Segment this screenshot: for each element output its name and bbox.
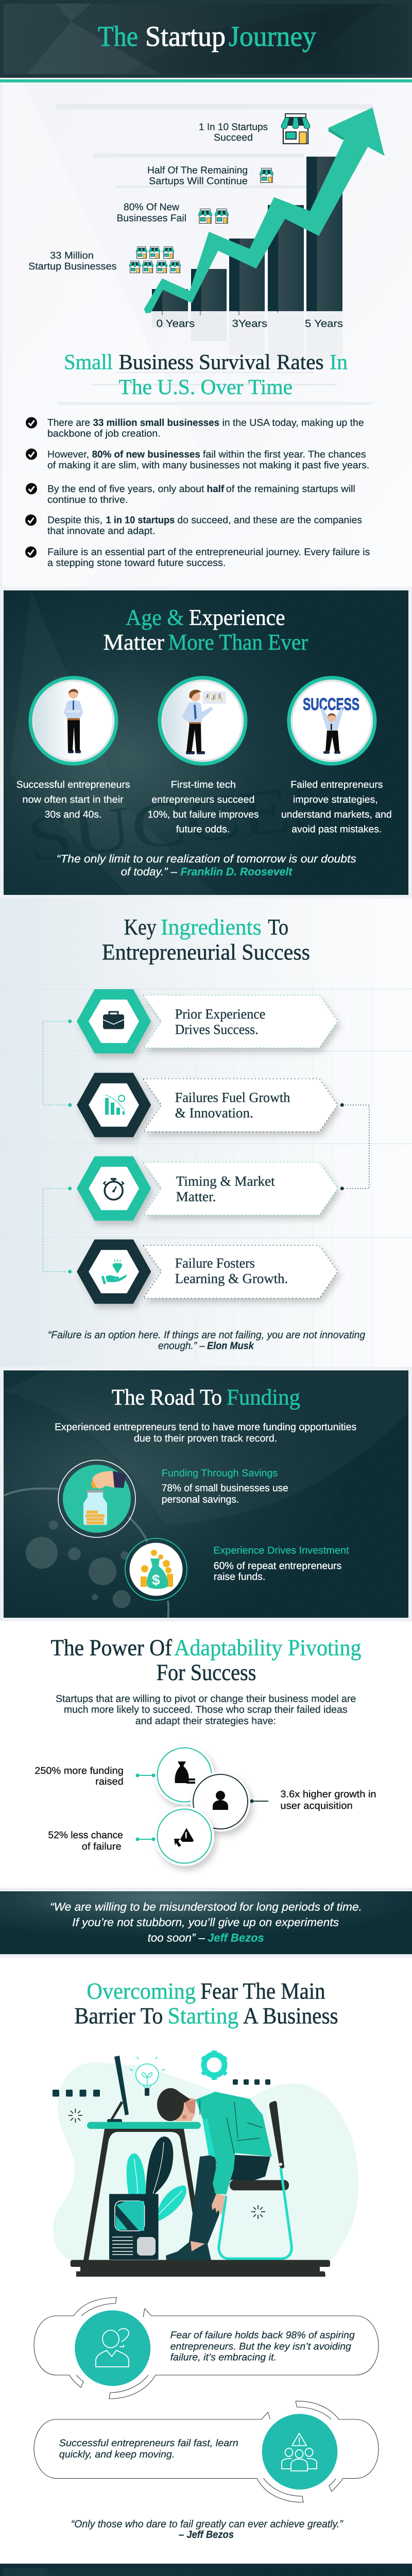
label: 3.6x higher growth [280,1789,376,1811]
label: 52% less chance: of failure [82,1841,122,1852]
text: experience drives investment: raise funds. [214,1571,265,1583]
heading: key ingredients [102,914,310,964]
text: timing and market matter: Matter. [176,1189,216,1205]
label: 250% more funding [35,1766,124,1787]
text: funding intro [55,1421,357,1444]
icon: confident entrepreneur in circle [28,676,118,766]
text: pivot intro: much more likely to succeed. Those who scrap their failed ideas [64,1704,348,1715]
label: 3.6x higher growth: 3.6x higher growth in [280,1789,376,1800]
heading: overcoming fear: A Business [243,2003,338,2029]
heading: key ingredients: To [268,914,288,940]
title: The [98,21,138,53]
text block: first-time tech entrepreneurs: future odds. [176,824,230,835]
panel: power of adaptability [0,1621,412,1888]
label: 1 in 10 startups succeed: Succeed [214,132,253,143]
bullet 4: Despite this, [47,515,102,526]
panel: Jeff Bezos quote band: Jeff Bezos [208,1931,264,1944]
label: 250% more funding: 250% more funding [35,1766,124,1776]
title: Startup [145,21,226,53]
quote: Franklin D. Roosevelt: of today.” – [121,866,178,878]
icon: briefcase [103,1012,124,1029]
label: 3 years: 3Years [232,318,267,329]
label: 33 million startup businesses: Startup Businesses [28,261,116,272]
text block: failed entrepreneurs [281,779,392,835]
heading: age and experience: Age & [126,605,184,630]
label: half of the remaining: Half Of The Remaining [147,165,248,176]
text: fail fast [59,2438,238,2460]
connector: left dotted 1-2 [43,1020,72,1107]
text: fear of failure [170,2330,355,2363]
quote: Elon Musk: Elon Musk [207,1340,254,1351]
ground under the illustration [71,2260,330,2277]
panel: Jeff Bezos quote band: If you’re not stubborn, you’ll give up on experiments [72,1916,339,1929]
panel: Jeff Bezos quote band [0,1891,412,1954]
panel: overcoming fear [0,1958,412,2564]
card: failures fuel growth [77,1073,338,1137]
text block: first-time tech entrepreneurs: First-time tech [171,779,236,790]
text: funding intro: Experienced entrepreneurs tend to have more funding opportunities [55,1421,357,1433]
icon: savings jar with coins [58,1460,135,1537]
bar chart with growth arrow [144,108,384,361]
bullet 5 [25,546,370,569]
bullet 1: 33 million small businesses [93,418,219,429]
label: 1 in 10 startups succeed: 1 In 10 Startups [199,122,268,133]
heading: small business survival rates: Survival [199,351,271,375]
text: timing and market matter [176,1174,275,1205]
text: funding through savings: 78% of small businesses use [162,1482,288,1494]
text: failure fosters learning and growth [175,1255,288,1286]
bullet 4: 1 in 10 startups [106,515,175,526]
bullet 1: There are [47,418,90,429]
heading: age and experience [103,605,308,655]
heading: small business survival rates: In [330,351,348,375]
heading: power of adaptability: Adaptability Pivoting [174,1635,362,1660]
bullet 3 [26,483,355,505]
text: fail fast: quickly, and keep moving. [59,2449,175,2460]
quote: Elon Musk: enough.” – [158,1340,205,1351]
label: 80% of new businesses fail: Businesses Fail [116,213,186,224]
connector: left dotted 3-4 [43,1187,72,1274]
heading: key ingredients: Ingredients [161,914,262,940]
icon: failure warning circle [154,1806,214,1866]
text: failures fuel growth and innovation: Failures Fuel Growth [175,1090,290,1105]
callout: fear of failure [34,2298,379,2399]
heading: key ingredients: Entrepreneurial Success [102,939,310,964]
text: failures fuel growth and innovation [175,1090,290,1121]
icon: money bag: $ [152,1572,160,1588]
connector: funding [136,1773,156,1777]
label: 3.6x higher growth: user acquisition [280,1801,353,1811]
bullet 3: By the end of five years, only about [47,484,204,495]
heading: power of adaptability: The Power Of [50,1635,172,1660]
quote: Franklin D. Roosevelt: Franklin D. Roosevelt [180,866,293,878]
label: 52% less chance [48,1830,123,1852]
title [98,21,316,53]
icon: person with idea [96,2329,129,2367]
label: 0 years: 0 Years [157,318,195,329]
heading: small business survival rates: Small [64,351,113,375]
panel: title header [0,0,412,82]
text: pivot intro: Startups that are willing to pivot or change their business model are [56,1693,356,1704]
text: pivot intro [56,1693,356,1727]
text: experience drives investment: Experience Drives Investment [213,1545,349,1556]
text: failure fosters learning and growth: Failure Fosters [175,1255,255,1270]
text: fear of failure: Fear of failure holds back 98% of aspiring [170,2330,355,2341]
icon: gear [201,2050,228,2080]
heading: the road to funding: Funding [227,1384,300,1410]
icon: user acquisition circle [191,1772,250,1832]
heading: power of adaptability [50,1635,362,1685]
heading: age and experience: More Than Ever [168,630,308,655]
icon: two stores [198,209,229,224]
illustration: exhausted entrepreneur at desk [53,2050,358,2261]
icon: large store [281,114,310,144]
text block: failed entrepreneurs: Failed entrepreneurs [290,779,383,790]
bullet 1: in the USA today, making up the [222,418,364,429]
icon: lightbulb [130,2057,165,2096]
text: failure fosters learning and growth: Learning & Growth. [175,1271,288,1286]
heading: small business survival rates [64,351,348,399]
bullet 2: 80% of new businesses [92,449,200,460]
text: funding through savings: personal savings. [162,1494,239,1505]
label: 33 million startup businesses [28,250,116,272]
connector: growth [250,1799,268,1803]
label: 52% less chance: 52% less chance [48,1830,123,1841]
text block: successful entrepreneurs [16,779,130,820]
panel: age and experience [4,590,408,895]
text: prior experience drives success: Drives Success. [175,1022,259,1037]
heading: overcoming fear: Starting [168,2003,238,2029]
text: fear of failure: entrepreneurs. But the key isn’t avoiding [170,2341,351,2352]
label: 80% of new businesses fail [116,202,186,224]
quote: Elon Musk: “Failure is an option here. If things are not failing, you are not innovating [48,1329,365,1341]
heading: age and experience: Experience [189,605,285,630]
heading: age and experience: Matter [103,630,164,655]
icon: funding circle [154,1745,214,1805]
title: Journey [229,21,316,53]
connector: right dotted 2-3 [340,1103,369,1190]
icon: entrepreneur lifting success in circle: SUCCESS [303,694,359,714]
text: funding through savings: Funding Through Savings [162,1468,278,1479]
quote: Franklin D. Roosevelt: “The only limit to our realization of tomorrow is our doubts [57,853,356,865]
panel: the road to funding [4,1370,408,1618]
card: failure fosters learning [77,1240,338,1304]
bullet 2: fail within the first year. The chances [203,449,366,460]
text block: successful entrepreneurs: 30s and 40s. [45,809,101,820]
bullet 5: Failure is an essential part of the entrepreneurial journey. Every failure is [47,547,370,558]
heading: key ingredients: Key [124,914,157,940]
heading: the road to funding [112,1384,300,1410]
text block: failed entrepreneurs: avoid past mistakes. [291,824,382,835]
panel: Jeff Bezos quote band: too soon” – [148,1931,205,1944]
heading: overcoming fear: Overcoming [87,1978,196,2004]
text: experience drives investment: 60% of repeat entrepreneurs [214,1561,342,1572]
quote: Franklin D. Roosevelt [57,853,356,878]
label: 80% of new businesses fail: 80% Of New [124,202,179,213]
text: pivot intro: and adapt their strategies have: [135,1716,276,1727]
bullet 4: do succeed, and these are the companies [177,515,362,526]
icon: team with warning [282,2433,317,2471]
text: experience drives investment [213,1545,349,1583]
heading: the road to funding: The Road To [112,1384,222,1410]
icon: entrepreneur lifting success in circle [287,676,376,766]
bullet 3: half [207,484,225,495]
label: half of the remaining: Sartups Will Continue [149,176,248,187]
text block: first-time tech entrepreneurs: 10%, but failure improves [148,809,259,820]
card: prior experience [77,989,338,1054]
bullet 2: of making it are slim, with many businesses not making it past five years. [47,460,369,471]
label: 33 million startup businesses: 33 Million [50,250,94,261]
bullet 2: However, [47,449,89,460]
icon: falling chart [105,1095,125,1115]
bullet 2 [26,448,369,471]
icon: entrepreneur with chart in circle [158,676,247,766]
text block: failed entrepreneurs: understand markets, and [281,809,392,820]
bullet 5: a stepping stone toward future success. [47,558,226,569]
text block: failed entrepreneurs: improve strategies, [293,794,378,805]
text: funding intro: due to their proven track record. [134,1433,277,1444]
text: prior experience drives success [175,1006,265,1037]
panel: small business survival rates [2,82,412,587]
heading: small business survival rates: The U.S. Over Time [119,376,293,399]
label: 5 years: 5 Years [305,318,343,329]
text: timing and market matter: Timing & Market [176,1174,275,1189]
icon: seven stores [129,246,181,273]
connector: failure [136,1837,156,1841]
text block: successful entrepreneurs: now often start in their [22,794,124,805]
bullet 4: that innovate and adapt. [47,526,156,537]
label: half of the remaining [147,165,248,187]
text: fail fast: Successful entrepreneurs fail fast, learn [59,2438,238,2449]
bullet 3: continue to thrive. [47,495,128,505]
bullet 4 [25,514,362,537]
icon: hand holding diamond [101,1259,127,1284]
heading: small business survival rates: Rates [277,351,324,375]
panel: Jeff Bezos quote band: “We are willing to be misunderstood for long periods of time. [50,1900,362,1913]
quote: Elon Musk [48,1329,365,1351]
text block: first-time tech entrepreneurs: entrepreneurs succeed [151,794,254,805]
panel: age and experience: SUCCESS [23,764,385,876]
heading: overcoming fear [74,1978,338,2029]
quote: Jeff Bezos: – Jeff Bezos [179,2529,234,2540]
text: fear of failure: failure, it’s embracing it. [170,2352,277,2363]
heading: small business survival rates: Business [119,351,194,375]
icon: store [260,168,273,183]
text: failures fuel growth and innovation: & Innovation. [175,1105,253,1121]
quote: Jeff Bezos [71,2518,344,2540]
text block: successful entrepreneurs: Successful entrepreneurs [16,779,130,790]
heading: power of adaptability: For Success [157,1659,256,1685]
panel: recommended reads [0,2564,412,2576]
quote: Jeff Bezos: “Only those who dare to fail greatly can ever achieve greatly.” [71,2518,344,2530]
icon: stopwatch [104,1178,124,1199]
panel: key ingredients [0,899,412,1367]
text: prior experience drives success: Prior Experience [175,1006,265,1022]
text: funding through savings [162,1468,288,1505]
heading: overcoming fear: Barrier To [74,2003,163,2029]
decorative bubbles and connecting curve [4,1488,168,1618]
label: 1 in 10 startups succeed [199,122,268,143]
callout: fail fast [34,2401,379,2502]
card: timing and market [77,1156,338,1221]
bullet 1 [26,417,364,439]
bullet 3: of the remaining startups will [226,484,355,495]
bullet 1: backbone of job creation. [47,429,161,439]
icon: money bag [125,1538,187,1600]
text block: first-time tech entrepreneurs [148,779,259,835]
label: 250% more funding: raised [95,1776,124,1787]
heading: overcoming fear: Fear The Main [200,1978,325,2004]
